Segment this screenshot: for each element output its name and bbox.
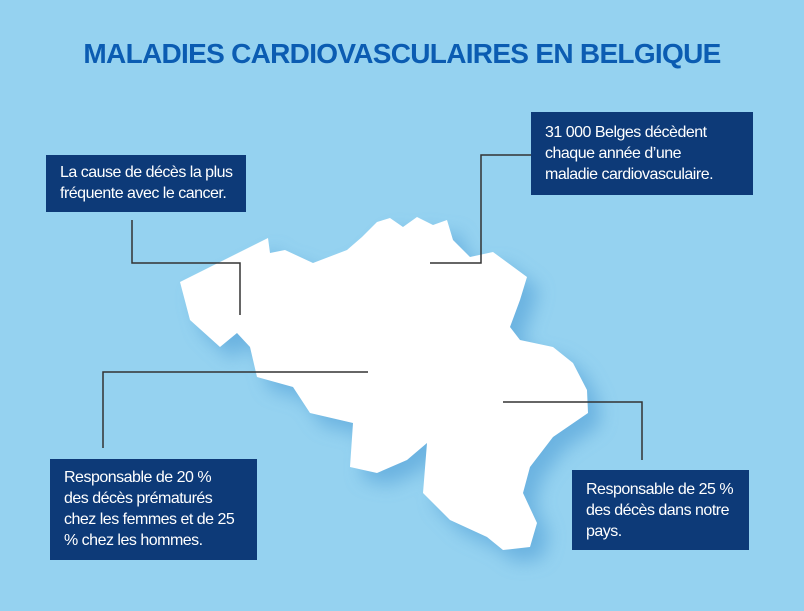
box: 31000 bbox=[531, 112, 753, 195]
map bbox=[180, 217, 588, 550]
box: 31000: maladie cardiovasculaire. bbox=[545, 166, 713, 183]
box: 31000: chaque année d’une bbox=[545, 145, 681, 162]
box: cause: fréquente avec le cancer. bbox=[60, 185, 226, 202]
box: 31000: 31 000 Belges décèdent bbox=[545, 124, 707, 141]
map shadow bbox=[192, 229, 600, 562]
box: cause bbox=[46, 155, 246, 212]
box: 25%: pays. bbox=[586, 523, 622, 540]
title: MALADIES CARDIOVASCULAIRES EN BELGIQUE bbox=[83, 38, 721, 69]
box: 20%: % chez les hommes. bbox=[64, 532, 203, 549]
box: 20%: des décès prématurés bbox=[64, 490, 212, 507]
box: 25%: des décès dans notre bbox=[586, 502, 729, 519]
connector lines bbox=[103, 155, 642, 460]
box: 20%: Responsable de 20 % bbox=[64, 469, 211, 486]
box: cause: La cause de décès la plus bbox=[60, 164, 233, 181]
box: 25%: Responsable de 25 % bbox=[586, 481, 733, 498]
box: 25% bbox=[572, 470, 749, 550]
box: 20% bbox=[50, 459, 257, 560]
box: 20%: chez les femmes et de 25 bbox=[64, 511, 234, 528]
